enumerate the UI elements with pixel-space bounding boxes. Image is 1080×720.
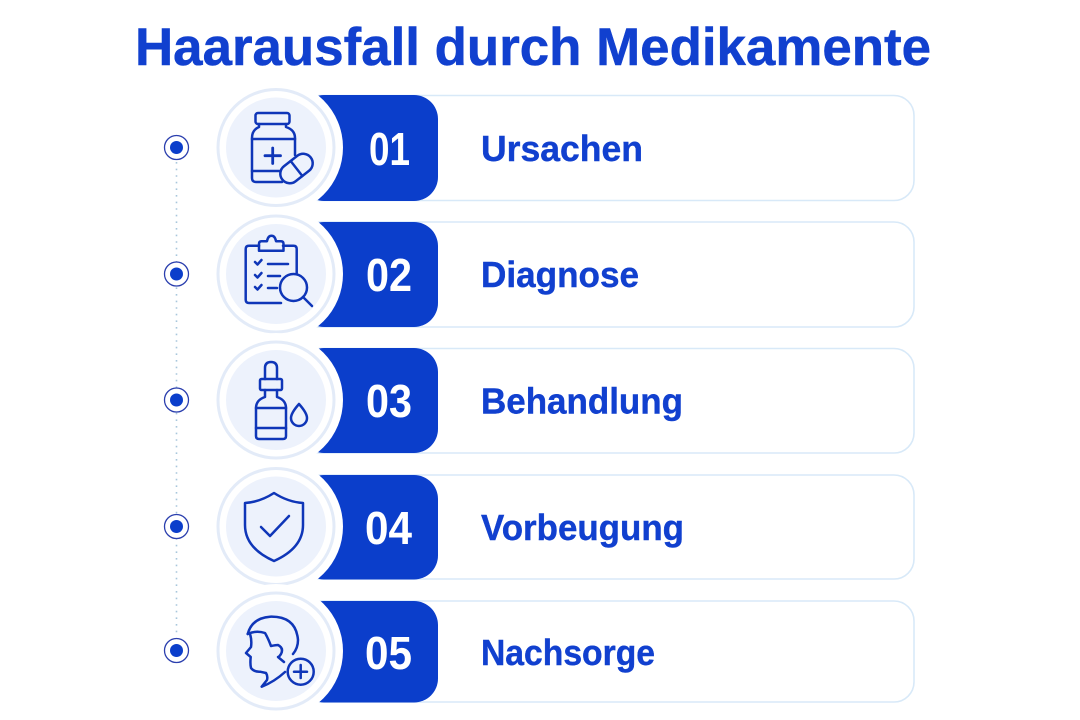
icon: medicine bottle and pill <box>252 113 317 187</box>
row 4: Vorbeugung <box>164 460 914 594</box>
icon: dropper bottle and drop <box>256 362 307 439</box>
timeline marker 3 <box>164 388 188 412</box>
label Nachsorge: Nachsorge <box>481 632 655 673</box>
panel 2 <box>300 222 914 327</box>
panel 4 <box>300 475 914 579</box>
timeline marker 5 <box>164 638 188 662</box>
icon circle 5 <box>209 584 343 718</box>
number 03: 03 <box>366 375 412 427</box>
number 04: 04 <box>365 502 412 554</box>
label Behandlung: Behandlung <box>481 380 683 422</box>
icon circle 4 <box>209 460 343 594</box>
row 2: Diagnose <box>164 207 914 341</box>
title: Haarausfall durch Medikamente <box>135 18 931 77</box>
icon: head profile with plus <box>246 617 314 687</box>
label Vorbeugung: Vorbeugung <box>481 507 684 548</box>
icon circle 2 <box>209 207 343 341</box>
row 1: Ursachen <box>164 80 914 214</box>
row 3: Behandlung <box>164 333 914 467</box>
timeline marker 4 <box>164 514 188 538</box>
panel 5 <box>300 601 914 702</box>
label Diagnose: Diagnose <box>481 254 639 295</box>
number 01: 01 <box>369 123 410 175</box>
panel 1 <box>300 96 914 200</box>
icon circle 3 <box>209 333 343 467</box>
number 05: 05 <box>365 627 412 679</box>
number tab 5 <box>300 601 438 702</box>
icon: clipboard with magnifier <box>246 236 312 306</box>
icon circle 1 <box>209 80 343 214</box>
row 5: Nachsorge <box>164 584 914 718</box>
number tab 3 <box>300 348 438 453</box>
icon: shield with check <box>245 493 303 561</box>
number tab 2 <box>300 222 438 327</box>
panel 3 <box>300 348 914 453</box>
number tab 1 <box>300 95 438 201</box>
label Ursachen: Ursachen <box>481 128 643 169</box>
number 02: 02 <box>366 249 412 301</box>
timeline dotted connector <box>176 162 178 636</box>
number tab 4 <box>300 475 438 580</box>
timeline marker 1 <box>164 136 188 160</box>
timeline marker 2 <box>164 262 188 286</box>
